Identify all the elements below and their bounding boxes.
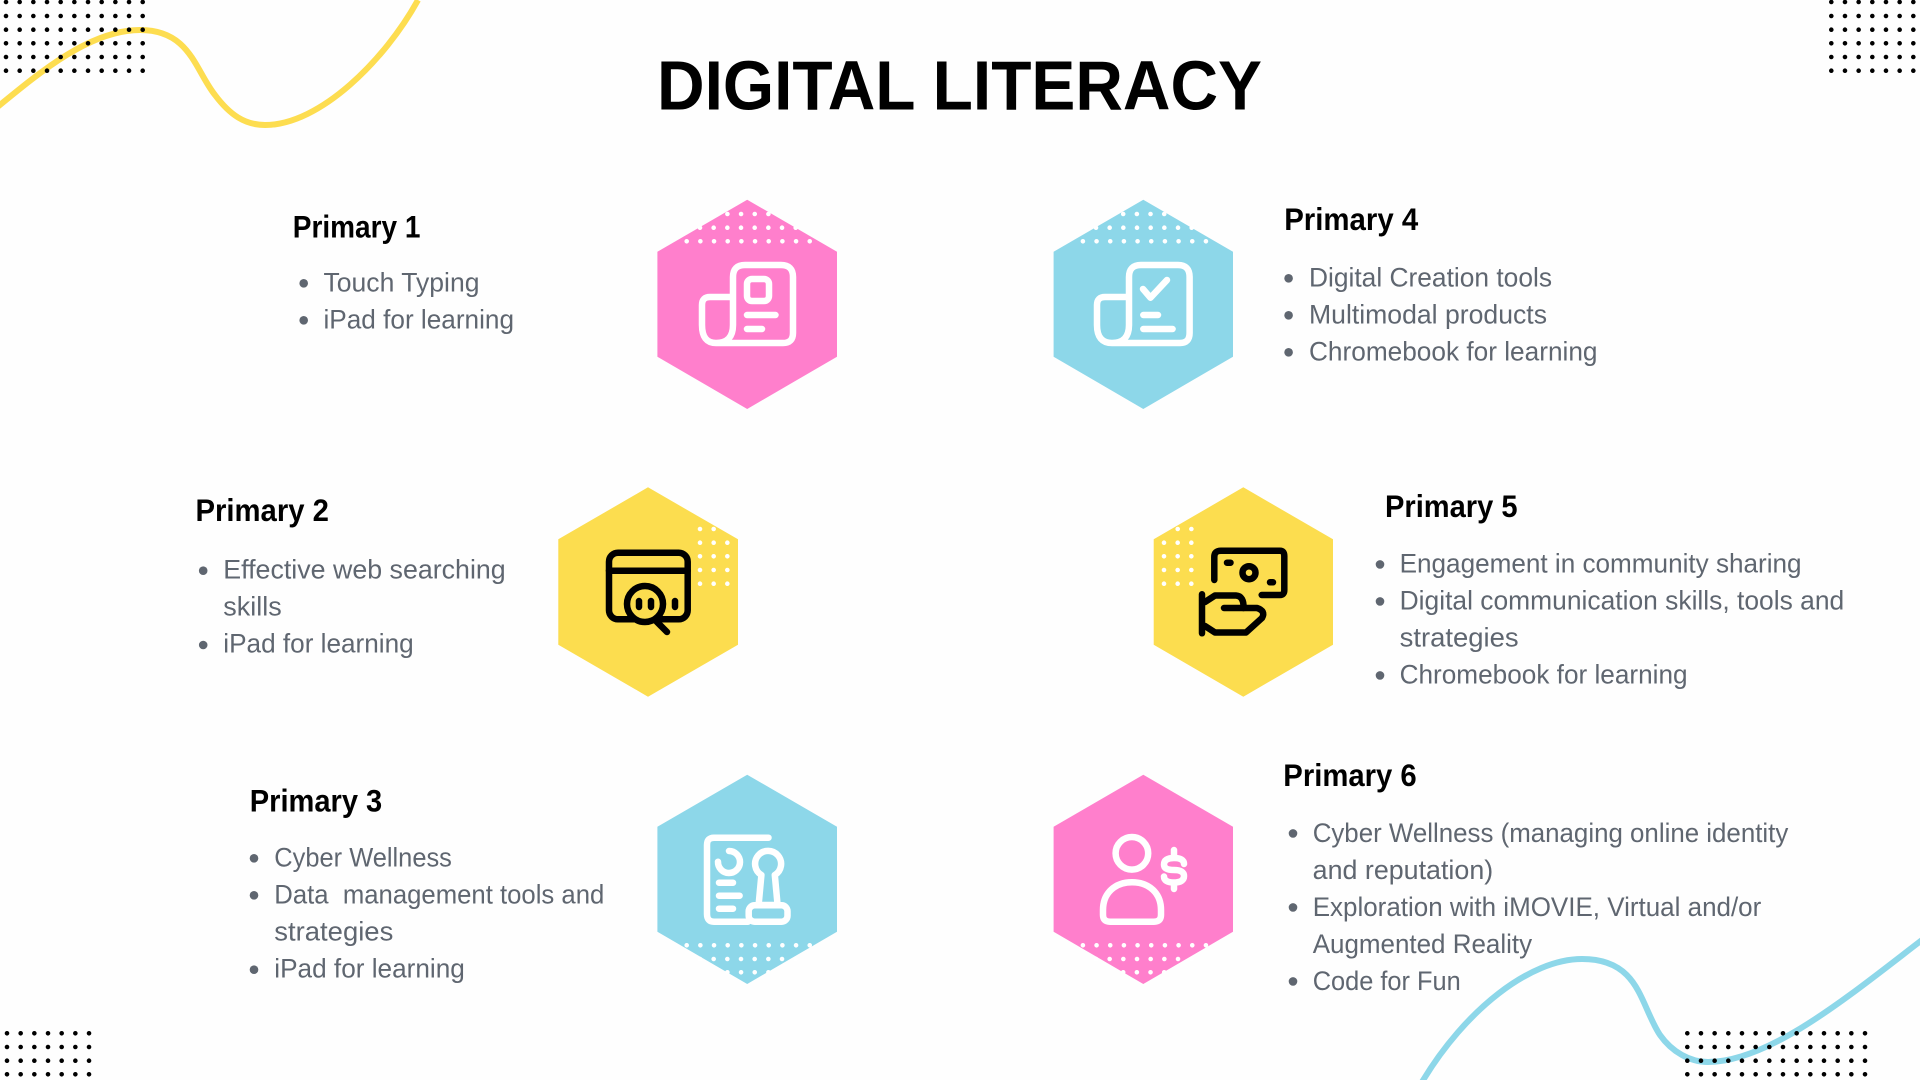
text block: primary 3: strategies [274, 917, 393, 947]
text block: primary 6: and reputation) [1313, 855, 1493, 885]
hexagon: primary 2 [558, 487, 738, 697]
heading: primary 1: Primary 1 [293, 209, 420, 245]
icon: document with picture [702, 265, 793, 343]
text block: primary 3: Data management tools and [274, 880, 604, 910]
text block: primary 3 [250, 782, 604, 984]
text block: primary 1: iPad for learning [324, 305, 514, 335]
hexagon: primary 5 [1154, 487, 1333, 697]
decorative blue curve, bottom right [1422, 940, 1920, 1080]
hexagon: primary 3 [657, 775, 837, 984]
heading: primary 6: Primary 6 [1283, 757, 1417, 793]
text block: primary 5: Digital communication skills, tools and [1400, 586, 1844, 616]
dot grid, top left [6, 2, 143, 71]
text block: primary 3: Cyber Wellness [274, 843, 452, 873]
text block: primary 4: Digital Creation tools [1309, 263, 1552, 293]
text block: primary 6: Exploration with iMOVIE, Virtual and/or [1313, 892, 1761, 922]
text block: primary 2 [196, 492, 506, 658]
text block: primary 2: iPad for learning [223, 628, 414, 658]
dot grid, bottom left [7, 1033, 90, 1074]
text block: primary 6 [1283, 757, 1789, 996]
title: DIGITAL LITERACY [657, 47, 1262, 125]
hexagon: primary 6 [1054, 775, 1233, 984]
text block: primary 2: skills [223, 591, 282, 621]
text block: primary 6: Augmented Reality [1313, 929, 1533, 959]
decorative yellow curve, top left [0, 0, 418, 125]
heading: primary 3: Primary 3 [250, 782, 382, 818]
text block: primary 3: iPad for learning [274, 954, 465, 984]
text block: primary 1: Touch Typing [324, 268, 480, 298]
text block: primary 5: Chromebook for learning [1400, 660, 1688, 690]
text block: primary 5 [1376, 488, 1844, 690]
hexagon: primary 4 [1054, 200, 1233, 409]
text block: primary 1 [293, 209, 514, 335]
heading: primary 5: Primary 5 [1385, 488, 1518, 524]
text block: primary 2: Effective web searching [223, 554, 506, 584]
text block: primary 4: Multimodal products [1309, 300, 1547, 330]
icon: hand holding banknote [1202, 551, 1284, 633]
text block: primary 5: strategies [1400, 623, 1519, 653]
text block: primary 4: Chromebook for learning [1309, 337, 1598, 367]
text block: primary 6: Code for Fun [1313, 966, 1461, 996]
heading: primary 4: Primary 4 [1284, 201, 1419, 237]
dot grid, bottom right [1687, 1033, 1866, 1074]
heading: primary 2: Primary 2 [196, 492, 329, 528]
text block: primary 5: Engagement in community sharing [1400, 549, 1802, 579]
text block: primary 4 [1284, 201, 1598, 367]
dot grid, top right [1831, 2, 1914, 71]
icon: document with stamp [707, 838, 788, 922]
icon: person with dollar sign [1103, 837, 1184, 922]
icon: browser window with magnifier [609, 553, 688, 632]
text block: primary 6: Cyber Wellness (managing online identity [1313, 818, 1789, 848]
hexagon: primary 1 [657, 200, 837, 409]
icon: document with check mark [1097, 265, 1190, 343]
